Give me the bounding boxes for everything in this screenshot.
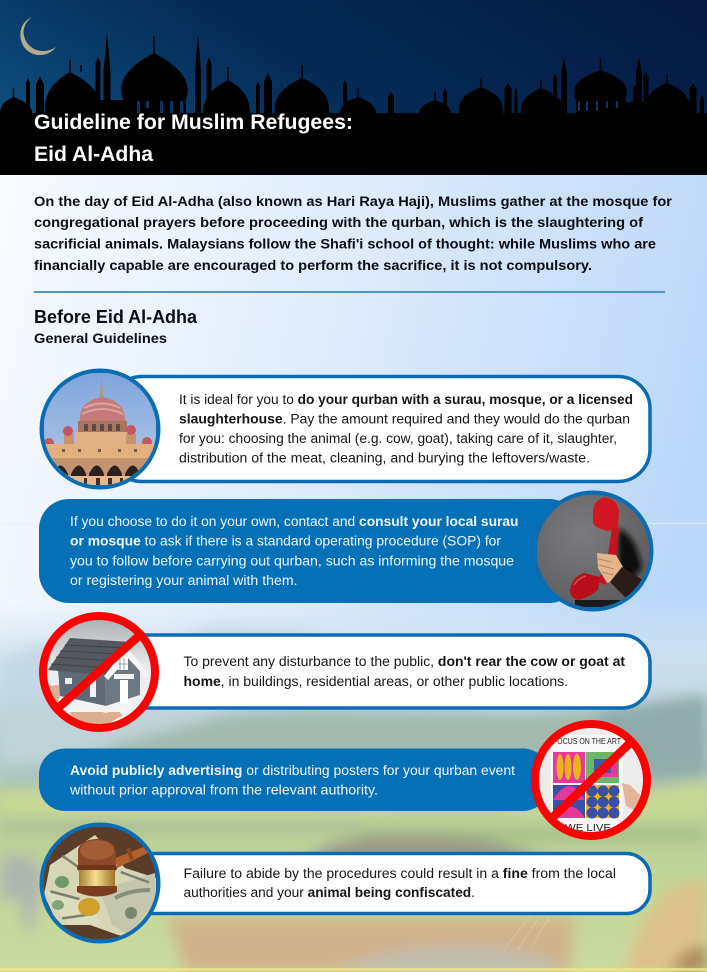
- text block: authorities and your animal being confiscated .: [184, 885, 475, 900]
- intro paragraph: congregational prayers before proceeding with the qurban, which is the slaughtering of: [34, 215, 643, 230]
- minarets: [104, 32, 110, 113]
- intro paragraph: [34, 194, 673, 273]
- pill background: [39, 748, 549, 811]
- text block: you to follow before carrying out qurban, such as informing the mosque: [70, 554, 514, 568]
- icon: prohibited poster: FOCUS ON THE ART: [553, 737, 621, 746]
- colonnade gaps: [137, 101, 618, 113]
- text block: [179, 392, 633, 466]
- text block: [70, 514, 518, 588]
- heading: before eid al-adha: Before Eid Al-Adha: [34, 307, 198, 327]
- pill background: [100, 854, 650, 914]
- text block: If you choose to do it on your own, contact and consult your local surau: [70, 514, 518, 529]
- intro paragraph: On the day of Eid Al-Adha (also known as Hari Raya Haji), Muslims gather at the mosque for: [34, 194, 673, 209]
- text block: Failure to abide by the procedures could result in a fine from the local: [184, 866, 616, 881]
- icon: prohibited poster: [533, 722, 649, 838]
- text block: To prevent any disturbance to the public, don't rear the cow or goat at: [184, 654, 626, 669]
- text block: without prior approval from the relevant authority.: [69, 782, 378, 798]
- whiskers: [505, 916, 550, 950]
- pill background: [39, 499, 579, 603]
- mosque skyline silhouette: [0, 32, 707, 175]
- finials: [14, 36, 667, 100]
- text block: distribution of the meat, cleaning, and burying the leftovers/waste.: [179, 450, 590, 466]
- background photo: meadow, mountains and cow: [0, 523, 707, 972]
- subheading: general guidelines: General Guidelines: [34, 331, 167, 346]
- title: Guideline for Muslim Refugees:: [34, 111, 353, 134]
- text block: or mosque to ask if there is a standard operating procedure (SOP) for: [70, 534, 502, 548]
- icon: hand holding red telephone: [532, 490, 654, 612]
- text block: Avoid publicly advertising or distributing posters for your qurban event: [70, 763, 515, 778]
- intro paragraph: financially capable are encouraged to perform the sacrifice, it is not compulsory.: [34, 258, 592, 273]
- icon: crescent moon: [20, 17, 56, 55]
- title: [34, 111, 353, 166]
- text block: It is ideal for you to do your qurban with a surau, mosque, or a licensed: [179, 392, 633, 407]
- title: Eid Al-Adha: [34, 143, 153, 166]
- panel: avoid publicly advertising: [39, 722, 649, 838]
- panel: fine and confiscation: [40, 822, 650, 944]
- text block: [184, 654, 626, 689]
- header banner with night sky and mosque skyline: [0, 0, 707, 175]
- panel: do not rear cow or goat at home: [41, 614, 650, 730]
- text block: or registering your animal with them.: [70, 573, 298, 588]
- icon: pink dome mosque photo: [40, 368, 160, 490]
- panel: consult local surau or mosque: [39, 490, 654, 612]
- intro paragraph: sacrificial animals. Malaysians follow the Shafi'i school of thought: while Muslims who are: [34, 236, 656, 252]
- text block: [69, 763, 515, 798]
- icon: prohibited poster: WE LIVE: [565, 823, 611, 834]
- text block: [184, 866, 616, 900]
- pill background: [110, 376, 650, 482]
- pill background: [100, 635, 650, 708]
- text block: for you: choosing the animal (e.g. cow, goat), taking care of it, slaughter,: [179, 431, 617, 446]
- icon: prohibited house in hands: [41, 614, 157, 730]
- icon: gavel on banknotes: [40, 822, 160, 944]
- text block: home, in buildings, residential areas, or other public locations.: [184, 674, 568, 689]
- text block: slaughterhouse . Pay the amount required and they would do the qurban: [179, 412, 630, 426]
- panel: qurban with a mosque: [40, 368, 650, 490]
